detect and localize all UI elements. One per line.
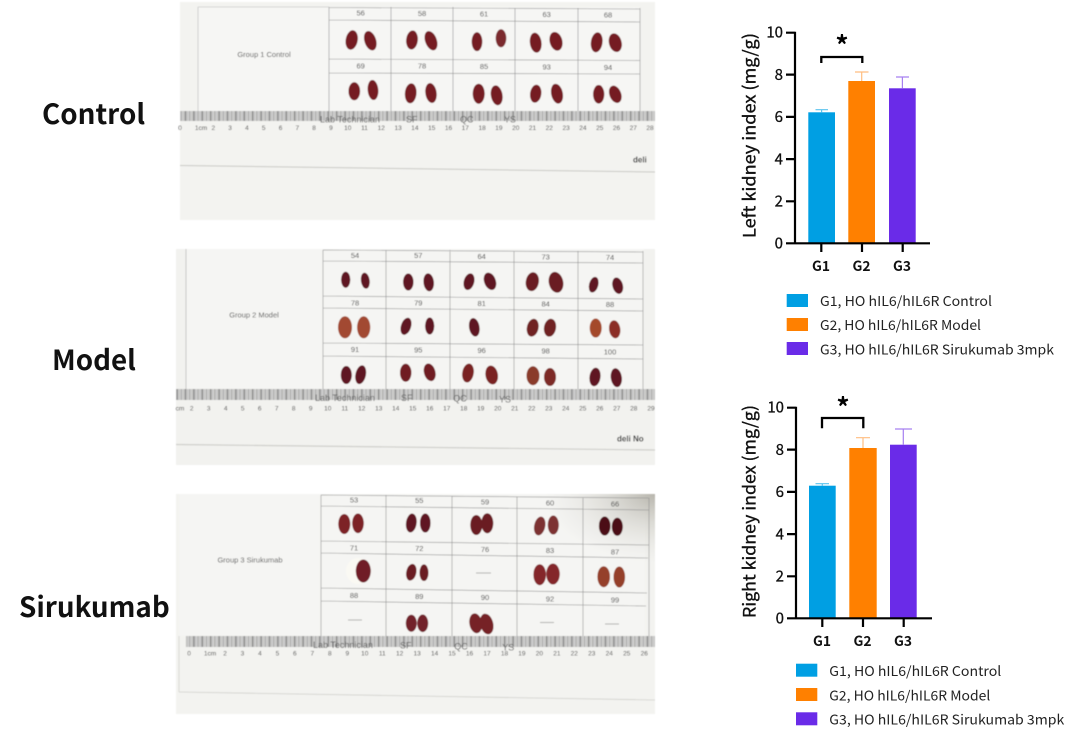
ruler, group 3: 3	[241, 650, 245, 658]
ruler, group 2: 4	[224, 406, 228, 412]
well numbers, group 3	[350, 496, 619, 604]
ruler, group 1: 2	[211, 125, 215, 132]
text: group 1 control: Group 1 Control	[237, 50, 291, 59]
y tick labels: 2	[776, 566, 784, 586]
y tick labels: 8	[775, 64, 783, 85]
y axis title: Right kidney index (mg/g)	[736, 405, 760, 618]
ruler, group 3: 25	[623, 650, 631, 658]
well numbers, group 2: 79	[414, 298, 422, 308]
ruler, group 2: 7	[275, 406, 279, 412]
y tick labels: 8	[776, 439, 784, 460]
ruler, group 3: 12	[396, 650, 404, 658]
ruler, group 3: 11	[379, 650, 386, 658]
well numbers, group 2: 57	[414, 251, 422, 260]
y tick labels	[766, 22, 783, 254]
axes	[786, 32, 930, 252]
ruler, group 3: 23	[588, 650, 596, 658]
ruler, group 3: 15	[448, 650, 456, 658]
ruler, group 1: 17	[462, 125, 469, 132]
ruler, group 2: cm	[176, 406, 184, 412]
well numbers, group 1: 94	[604, 63, 612, 72]
panel: control group photo	[178, 2, 655, 220]
ruler, group 2: 8	[292, 406, 296, 412]
ruler, group 1	[178, 111, 655, 172]
x tick labels: G2	[853, 630, 872, 650]
ruler, group 2: 5	[241, 406, 245, 412]
ruler, group 2: 11	[341, 406, 348, 412]
y tick labels: 0	[775, 232, 783, 254]
ruler, group 1: YS	[504, 115, 516, 125]
ruler, group 1: 9	[329, 125, 333, 132]
well numbers, group 2: 78	[351, 298, 359, 308]
legend: left kidney chart: G3, HO hIL6/hIL6R Sirukumab 3mpk	[820, 338, 1055, 358]
ruler, group 1: 6	[279, 125, 283, 132]
significance bracket	[822, 418, 863, 428]
legend: right kidney chart: G2, HO hIL6/hIL6R Model	[829, 684, 990, 704]
well numbers, group 1: 68	[604, 10, 612, 20]
ruler, group 3: 6	[293, 650, 297, 658]
ruler, group 2: 27	[613, 406, 621, 412]
y tick labels: 6	[775, 106, 783, 127]
well numbers, group 3: 99	[611, 596, 619, 604]
ruler, group 2: 9	[309, 406, 313, 412]
y tick labels	[767, 396, 784, 628]
ruler, group 3: QC	[454, 642, 468, 652]
well numbers, group 3: 53	[350, 496, 358, 504]
ruler, group 1: 10	[344, 125, 352, 132]
ruler, group 3: 17	[483, 650, 491, 658]
well numbers, group 2: 64	[478, 252, 486, 261]
ruler, group 1: deli	[633, 156, 647, 164]
y tick labels: 10	[766, 22, 783, 42]
ruler, group 3: 7	[310, 650, 314, 658]
ruler, group 1: 1cm	[195, 125, 207, 132]
ruler, group 3: 5	[276, 650, 280, 658]
ruler, group 3: 10	[361, 650, 369, 658]
well numbers, group 3: 55	[415, 496, 423, 505]
ruler, group 2: 20	[494, 406, 502, 412]
ruler, group 2: 12	[358, 406, 366, 412]
well numbers, group 1: 85	[480, 62, 488, 71]
ruler, group 3: 4	[258, 650, 262, 658]
well numbers, group 2: 54	[351, 251, 359, 260]
well numbers, group 3: 72	[415, 544, 423, 553]
ruler, group 3: 2	[223, 650, 227, 658]
well numbers, group 3: 88	[350, 591, 358, 600]
ruler, group 1: 21	[529, 125, 536, 132]
ruler, group 3: 0	[187, 650, 191, 658]
well numbers, group 3: 87	[611, 548, 619, 556]
well numbers, group 3: 92	[546, 594, 554, 604]
ruler, group 2: 23	[545, 406, 553, 412]
ruler, group 1: Lab Technician	[320, 115, 380, 125]
ruler, group 2: 2	[190, 406, 194, 412]
bars and error bars	[808, 72, 916, 243]
ruler, group 2: Lab Technician	[315, 393, 375, 403]
ruler, group 2: QC	[453, 394, 467, 404]
panel: sirukumab group photo	[176, 494, 655, 714]
ruler, group 3: 9	[345, 650, 349, 658]
x tick labels: G1	[812, 255, 830, 275]
text: group 2 model: Group 2 Model	[229, 310, 279, 320]
x tick labels	[813, 630, 912, 650]
ruler, group 3: 20	[536, 650, 543, 658]
ruler, group 2: 14	[392, 406, 400, 412]
legend: left kidney chart	[787, 290, 1055, 358]
ruler, group 3: 26	[641, 650, 648, 658]
ruler, group 2: 25	[579, 406, 587, 412]
well numbers, group 2: 73	[542, 252, 550, 262]
ruler, group 1: SF	[406, 115, 418, 125]
kidneys, group 1	[344, 29, 624, 106]
y tick labels: 4	[776, 524, 784, 544]
ruler, group 1: 20	[512, 125, 520, 132]
ruler, group 3: Lab Technician	[313, 640, 373, 650]
label: Model: Model	[52, 339, 136, 379]
x tick labels: G1	[813, 630, 831, 650]
kidneys, group 2	[338, 271, 625, 388]
ruler, group 2: SF	[401, 393, 413, 403]
ruler, group 2: 29	[647, 406, 655, 412]
ruler, group 1: 14	[411, 125, 419, 132]
chart: left kidney index	[736, 22, 930, 275]
well numbers, group 2: 91	[351, 345, 359, 354]
ruler, group 2: 22	[528, 406, 536, 412]
ruler, group 3: 22	[571, 650, 578, 658]
ruler, group 1: 24	[579, 125, 587, 132]
well numbers, group 3: 76	[481, 545, 489, 554]
ruler, group 1: 16	[445, 125, 452, 132]
y axis title: Left kidney index (mg/g)	[736, 33, 760, 238]
y tick labels: 4	[775, 148, 783, 170]
ruler, group 1: 12	[378, 125, 385, 132]
ruler, group 3: 1cm	[204, 650, 216, 658]
ruler, group 3	[179, 636, 655, 700]
well numbers, group 1: 61	[480, 10, 488, 18]
legend: right kidney chart: G3, HO hIL6/hIL6R Sirukumab 3mpk	[829, 709, 1065, 729]
ruler, group 1: 19	[495, 125, 503, 132]
ruler, group 3: 8	[328, 650, 332, 658]
legend: right kidney chart: G1, HO hIL6/hIL6R Control	[829, 660, 1001, 680]
y tick labels: 6	[776, 481, 784, 502]
ruler, group 3: SF	[400, 641, 412, 651]
text: group 3 sirukumab: Group 3 Sirukumab	[217, 556, 283, 564]
ruler, group 1: 26	[613, 125, 620, 132]
well numbers, group 3: 89	[415, 592, 423, 601]
ruler, group 2: 6	[258, 406, 262, 412]
well numbers, group 3: 90	[481, 593, 489, 602]
ruler, group 1: 3	[228, 125, 232, 132]
x tick labels: G3	[893, 255, 911, 275]
ruler, group 3: 14	[431, 650, 439, 658]
ruler, group 1: 15	[428, 125, 436, 132]
y tick labels: 10	[767, 396, 784, 418]
well numbers, group 3: 59	[481, 498, 489, 506]
ruler, group 1: 8	[312, 125, 316, 132]
legend: left kidney chart: G1, HO hIL6/hIL6R Control	[820, 290, 992, 310]
ruler, group 1: 18	[478, 125, 486, 132]
ruler, group 3: 19	[518, 650, 526, 658]
ruler, group 2: 21	[511, 406, 519, 412]
x tick labels: G3	[894, 630, 912, 650]
ruler, group 2: 19	[477, 406, 485, 412]
ruler, group 2: 3	[207, 406, 211, 412]
well numbers, group 2: 98	[542, 346, 550, 356]
ruler, group 2: 24	[562, 406, 570, 412]
ruler, group 2: deli No	[617, 434, 644, 444]
x tick labels	[812, 255, 911, 275]
ruler, group 2: 15	[409, 406, 417, 412]
well numbers, group 2: 88	[606, 300, 614, 309]
axes	[787, 407, 932, 627]
ruler, group 1: 11	[361, 125, 368, 132]
well numbers, group 1: 78	[418, 62, 426, 70]
ruler, group 1: 28	[646, 125, 654, 132]
ruler, group 3: 13	[413, 650, 421, 658]
ruler, group 3: YS	[502, 643, 514, 653]
panel: model group photo	[176, 249, 655, 465]
well numbers, group 2: 74	[606, 253, 614, 262]
x tick labels: G2	[852, 255, 871, 275]
y tick labels: 2	[775, 190, 783, 212]
ruler, group 2: 18	[460, 406, 468, 412]
ruler, group 1: 5	[262, 125, 266, 132]
ruler, group 2: 13	[375, 406, 383, 412]
well numbers, group 1: 56	[357, 8, 365, 18]
legend: left kidney chart: G2, HO hIL6/hIL6R Model	[820, 314, 981, 334]
y tick labels: 0	[776, 608, 784, 628]
ruler, group 1: 22	[546, 125, 553, 132]
label: Sirukumab: Sirukumab	[19, 586, 170, 626]
significance bracket	[821, 57, 862, 63]
well numbers, group 2: 96	[478, 346, 486, 355]
well numbers, group 2: 84	[542, 300, 550, 308]
ruler, group 2: 17	[443, 406, 451, 412]
ruler, group 1: 25	[596, 125, 604, 132]
well numbers, group 2: 81	[478, 299, 486, 308]
ruler, group 1: 0	[178, 125, 182, 132]
well numbers, group 1	[357, 8, 612, 72]
legend: right kidney chart	[796, 660, 1065, 729]
well numbers, group 1: 69	[357, 62, 365, 70]
ruler, group 2: YS	[499, 394, 511, 404]
bars and error bars	[809, 429, 917, 618]
well numbers, group 2: 100	[604, 348, 616, 356]
ruler, group 2: 28	[630, 406, 638, 412]
well numbers, group 1: 93	[543, 62, 551, 72]
ruler, group 1: QC	[460, 115, 474, 125]
ruler, group 1: 7	[295, 125, 299, 132]
well numbers, group 1: 58	[418, 9, 426, 18]
chart: right kidney index	[736, 388, 932, 650]
ruler, group 2	[176, 389, 655, 450]
well numbers, group 2: 95	[414, 346, 422, 354]
significance star: *	[835, 26, 849, 63]
ruler, group 1: 23	[562, 125, 570, 132]
well numbers, group 3: 66	[611, 500, 619, 508]
ruler, group 2: 16	[426, 406, 434, 412]
ruler, group 1: 13	[394, 125, 402, 132]
ruler, group 2: 26	[596, 406, 604, 412]
kidneys, group 3	[338, 513, 625, 636]
ruler, group 3: 18	[501, 650, 508, 658]
well numbers, group 3: 71	[350, 544, 358, 552]
well numbers, group 3: 83	[546, 546, 554, 555]
empty well dashes	[348, 573, 619, 624]
ruler, group 1: 27	[630, 125, 637, 132]
well numbers, group 1: 63	[543, 10, 551, 19]
ruler, group 3: 24	[606, 650, 613, 658]
well numbers, group 3: 60	[546, 498, 554, 508]
ruler, group 3: 21	[553, 650, 561, 658]
well numbers, group 2	[351, 251, 616, 356]
ruler, group 1: 4	[245, 125, 249, 132]
ruler, group 3: 16	[466, 650, 473, 658]
significance star: *	[836, 388, 850, 425]
ruler, group 2: 10	[324, 406, 332, 412]
label: Control: Control	[42, 93, 145, 133]
